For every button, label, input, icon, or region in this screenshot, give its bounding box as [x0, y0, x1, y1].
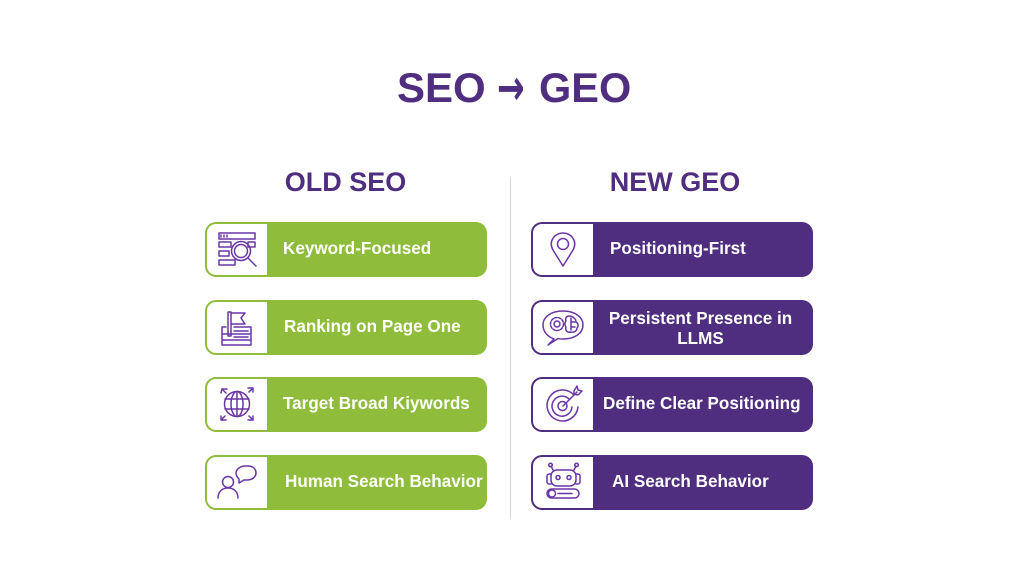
card: Target Broad Kiywords — [205, 377, 487, 432]
title: GEO — [539, 64, 631, 111]
card: Ranking on Page One — [205, 300, 487, 354]
title: SEO — [397, 64, 486, 111]
label: Target Broad Kiywords — [283, 394, 470, 413]
label: Keyword-Focused — [283, 239, 431, 258]
icon: globe with arrows — [207, 379, 267, 430]
label: Persistent Presence in — [609, 308, 792, 328]
heading: new GEO: NEW GEO — [610, 167, 740, 197]
label: Human Search Behavior — [285, 472, 483, 490]
label — [609, 308, 792, 348]
divider — [510, 177, 511, 519]
icon: keyword search — [207, 224, 267, 275]
icon: flag on page — [207, 302, 267, 352]
label: Define Clear Positioning — [603, 394, 801, 413]
label: Positioning-First — [610, 239, 746, 258]
card: Positioning-First — [531, 222, 813, 277]
label: Ranking on Page One — [284, 316, 461, 336]
card: Persistent Presence in LLMS — [531, 300, 813, 354]
card: Human Search Behavior — [205, 454, 487, 510]
title: → — [497, 58, 525, 116]
icon: target with arrow — [533, 379, 593, 430]
icon: brain gear speech bubble — [533, 302, 593, 352]
icon: robot with search bar — [533, 456, 593, 508]
card: Define Clear Positioning — [531, 377, 813, 432]
label: LLMS — [677, 328, 724, 348]
icon: person with speech bubble — [207, 456, 267, 508]
label: AI Search Behavior — [612, 472, 769, 490]
card: AI Search Behavior — [531, 454, 813, 510]
title — [397, 58, 631, 116]
card: Keyword-Focused — [205, 222, 487, 277]
heading: old SEO: OLD SEO — [285, 167, 406, 197]
icon: location pin — [533, 224, 593, 275]
